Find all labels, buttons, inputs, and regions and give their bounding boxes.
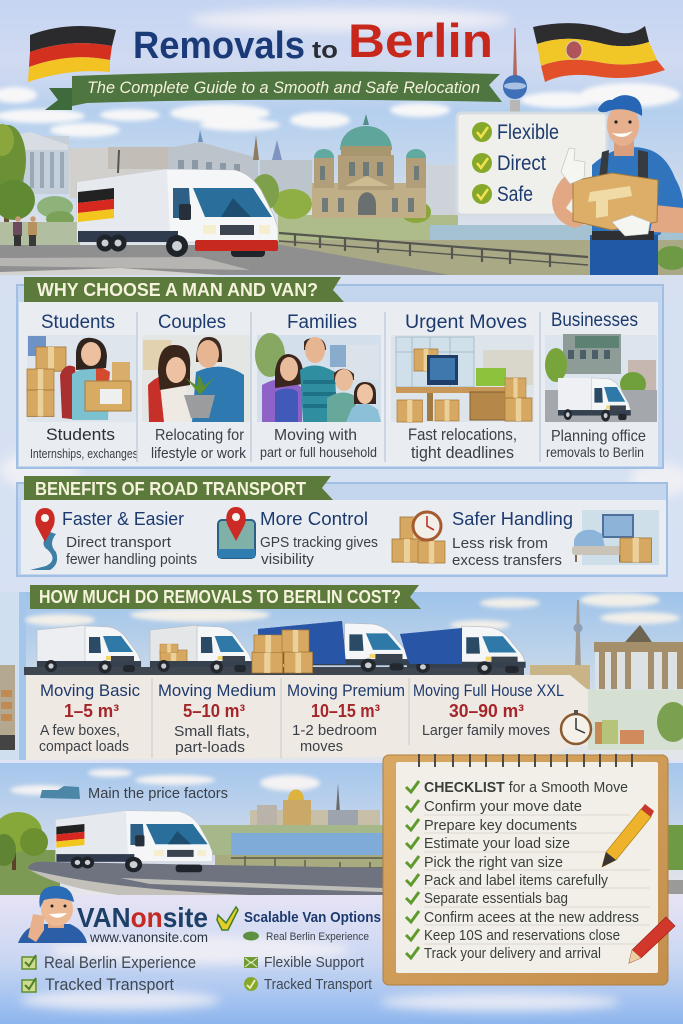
Berlin Cathedral <box>312 114 426 218</box>
tier: Moving Premium: moves <box>300 738 343 755</box>
flag: right flag with crest <box>533 23 665 82</box>
illustration: office desk with boxes <box>391 335 534 422</box>
checklist items: Pack and label items carefully <box>424 872 608 889</box>
caption: part or full household <box>260 444 377 460</box>
trees <box>0 812 60 895</box>
delivery worker holding box <box>552 95 683 275</box>
benefit: Safer Handling <box>392 509 659 569</box>
Brandenburg Gate <box>588 625 683 750</box>
checklist items: Pick the right van size <box>424 854 563 871</box>
checklist items: Keep 10S and reservations close <box>424 927 620 944</box>
column: Businesses: Businesses <box>551 310 638 331</box>
clock and small boxes <box>561 710 644 744</box>
Safe item <box>472 183 533 206</box>
caption: lifestyle or work <box>151 445 246 462</box>
caption: Internships, exchanges <box>30 446 138 461</box>
Berlin TV tower small <box>530 600 590 689</box>
feature: Tracked Transport right: Tracked Transport <box>264 976 373 993</box>
van: medium <box>150 625 252 674</box>
column: Couples <box>142 312 250 462</box>
column: Students <box>27 312 138 461</box>
checklist notepad <box>383 754 675 985</box>
benefit: Faster & Easier <box>30 508 197 570</box>
checklist items: CHECKLIST for a Smooth Move <box>424 779 628 796</box>
subtitle ribbon <box>45 71 502 110</box>
icon: yellow pencil <box>602 804 654 867</box>
feature: Tracked Transport: Tracked Transport <box>45 975 174 994</box>
caption: tight deadlines <box>411 443 514 462</box>
icon: furniture <box>572 510 659 565</box>
hero scene <box>0 28 683 275</box>
tier: Moving Premium: Moving Premium <box>287 681 405 700</box>
benefit: Faster & Easier: Faster & Easier <box>62 509 184 529</box>
van: premium with cardboard boxes <box>252 621 411 673</box>
tier: Moving Full House XXL: Moving Full House XXL <box>413 681 564 700</box>
illustration: family of four <box>255 333 381 422</box>
tier: Moving Medium: part-loads <box>175 739 245 756</box>
tier: Moving Basic: A few boxes, <box>40 722 120 739</box>
price table <box>26 675 588 760</box>
benefit: Safer Handling: Safer Handling <box>452 509 573 529</box>
benefit: More Control: GPS tracking gives <box>260 534 378 551</box>
caption: Fast relocations, <box>408 425 517 444</box>
white removal van with German flag <box>77 169 278 257</box>
tier: Moving Medium: Moving Medium <box>158 681 276 700</box>
column: Urgent Moves <box>391 312 534 462</box>
caption: Moving with <box>274 427 357 444</box>
section heading: HOW MUCH DO REMOVALS TO BERLIN COST? <box>39 587 401 607</box>
van: basic <box>37 625 141 674</box>
van: full house <box>400 626 526 674</box>
logo text: VANonsite <box>77 902 208 933</box>
green strip and river <box>0 174 683 275</box>
Direct item <box>472 152 546 175</box>
caption <box>546 428 646 460</box>
Direct item: Direct <box>497 152 546 175</box>
tier: Moving Full House XXL <box>413 681 564 739</box>
title: Removals <box>133 25 305 67</box>
section heading: WHY CHOOSE A MAN AND VAN? <box>37 280 318 300</box>
road <box>28 862 383 895</box>
tier: Moving Medium: Small flats, <box>174 723 250 740</box>
spiral rings <box>419 754 632 767</box>
icon: small car <box>40 786 80 799</box>
left skyline buildings <box>12 130 458 215</box>
caption: Students <box>46 425 115 444</box>
caption: removals to Berlin <box>546 444 644 460</box>
caption <box>30 425 138 461</box>
people on left <box>13 216 37 246</box>
caption: Relocating for <box>155 427 245 444</box>
checklist items <box>406 779 639 962</box>
distant city <box>250 783 380 828</box>
red bumper <box>195 240 278 251</box>
feature: Real Berlin Experience: Real Berlin Experience <box>44 953 196 972</box>
title <box>133 14 493 67</box>
mascot <box>18 886 87 943</box>
sky and clouds <box>0 60 683 265</box>
fence <box>279 233 588 267</box>
icon: red pencil <box>629 917 675 963</box>
feature: scalable van options: Scalable Van Options <box>244 909 381 926</box>
Flexible item: Flexible <box>497 121 559 144</box>
tier: Moving Basic: Moving Basic <box>40 681 140 700</box>
label: price factors: Main the price factors <box>88 785 228 802</box>
title: to <box>312 37 338 64</box>
icon: pin and road <box>30 508 57 570</box>
column: Couples: Couples <box>158 312 226 333</box>
checklist items: Separate essentials bag <box>424 890 568 907</box>
panel: benefits of road transport <box>17 476 667 576</box>
footer brand <box>18 886 381 994</box>
benefit: Faster & Easier: Direct transport <box>66 534 172 551</box>
white van with flag <box>56 811 212 872</box>
Flexible item <box>472 121 559 144</box>
caption <box>408 425 517 462</box>
tier: Moving Full House XXL: 30–90 m³ <box>449 701 524 721</box>
feature: small Real Berlin Experience: Real Berlin Experience <box>266 931 369 943</box>
checklist items: Estimate your load size <box>424 835 570 852</box>
illustration: couple with plant <box>142 335 250 422</box>
road strip <box>24 667 524 675</box>
tier: Moving Basic: 1–5 m³ <box>64 701 119 721</box>
benefit: More Control: More Control <box>260 509 368 529</box>
scene: price factors with van <box>0 763 683 895</box>
benefit: Safer Handling: Less risk from <box>452 535 548 552</box>
tier: Moving Premium <box>287 681 405 755</box>
tier: Moving Premium: 10–15 m³ <box>311 701 380 721</box>
subtitle ribbon: The Complete Guide to a Smooth and Safe Relocation <box>87 78 480 97</box>
caption <box>151 427 246 462</box>
website: www.vanonsite.com <box>89 929 208 945</box>
caption <box>260 427 377 460</box>
street lamp <box>118 150 119 173</box>
icon: map with pin <box>218 507 255 558</box>
panel: why choose a man and van <box>17 277 663 468</box>
benefit: Safer Handling: excess transfers <box>452 552 562 569</box>
column: Businesses <box>545 310 657 460</box>
illustration: student with box <box>27 335 137 422</box>
trees left <box>0 124 74 227</box>
caption: Planning office <box>551 428 646 445</box>
checklist card: Flexible Direct Safe <box>457 113 607 215</box>
column: Families: Families <box>287 312 357 333</box>
benefit: More Control: visibility <box>261 551 314 568</box>
checklist items: Confirm acees at the new address <box>424 909 639 926</box>
Safe item: Safe <box>497 183 533 206</box>
flag: left German flag <box>28 26 116 82</box>
tier: Moving Medium: 5–10 m³ <box>183 701 245 721</box>
icon: big check <box>217 907 238 930</box>
column: Families <box>255 312 381 460</box>
checklist items: Track your delivery and arrival <box>424 945 601 962</box>
column: Urgent Moves: Urgent Moves <box>405 312 527 333</box>
title: Berlin <box>348 14 493 67</box>
icon: boxes and stopwatch <box>392 512 445 563</box>
column: Students: Students <box>41 312 115 333</box>
road <box>0 245 450 275</box>
tier: Moving Basic: compact loads <box>39 738 129 755</box>
tier: Moving Premium: 1-2 bedroom <box>292 722 377 739</box>
checklist items: Confirm your move date <box>424 798 582 815</box>
panel: removal cost <box>0 585 683 760</box>
feature: Flexible Support: Flexible Support <box>264 954 365 971</box>
benefit: More Control <box>218 507 378 568</box>
checklist items: Prepare key documents <box>424 817 577 834</box>
tier: Moving Full House XXL: Larger family moves <box>422 722 550 739</box>
benefit: Faster & Easier: fewer handling points <box>66 551 197 568</box>
section heading: BENEFITS OF ROAD TRANSPORT <box>35 479 306 499</box>
tier: Moving Basic <box>39 681 140 755</box>
illustration: office building and van <box>545 334 657 422</box>
green bank and lake <box>190 825 683 894</box>
TV tower <box>503 28 527 112</box>
city scene backdrop <box>0 592 683 760</box>
tier: Moving Medium <box>158 681 276 756</box>
